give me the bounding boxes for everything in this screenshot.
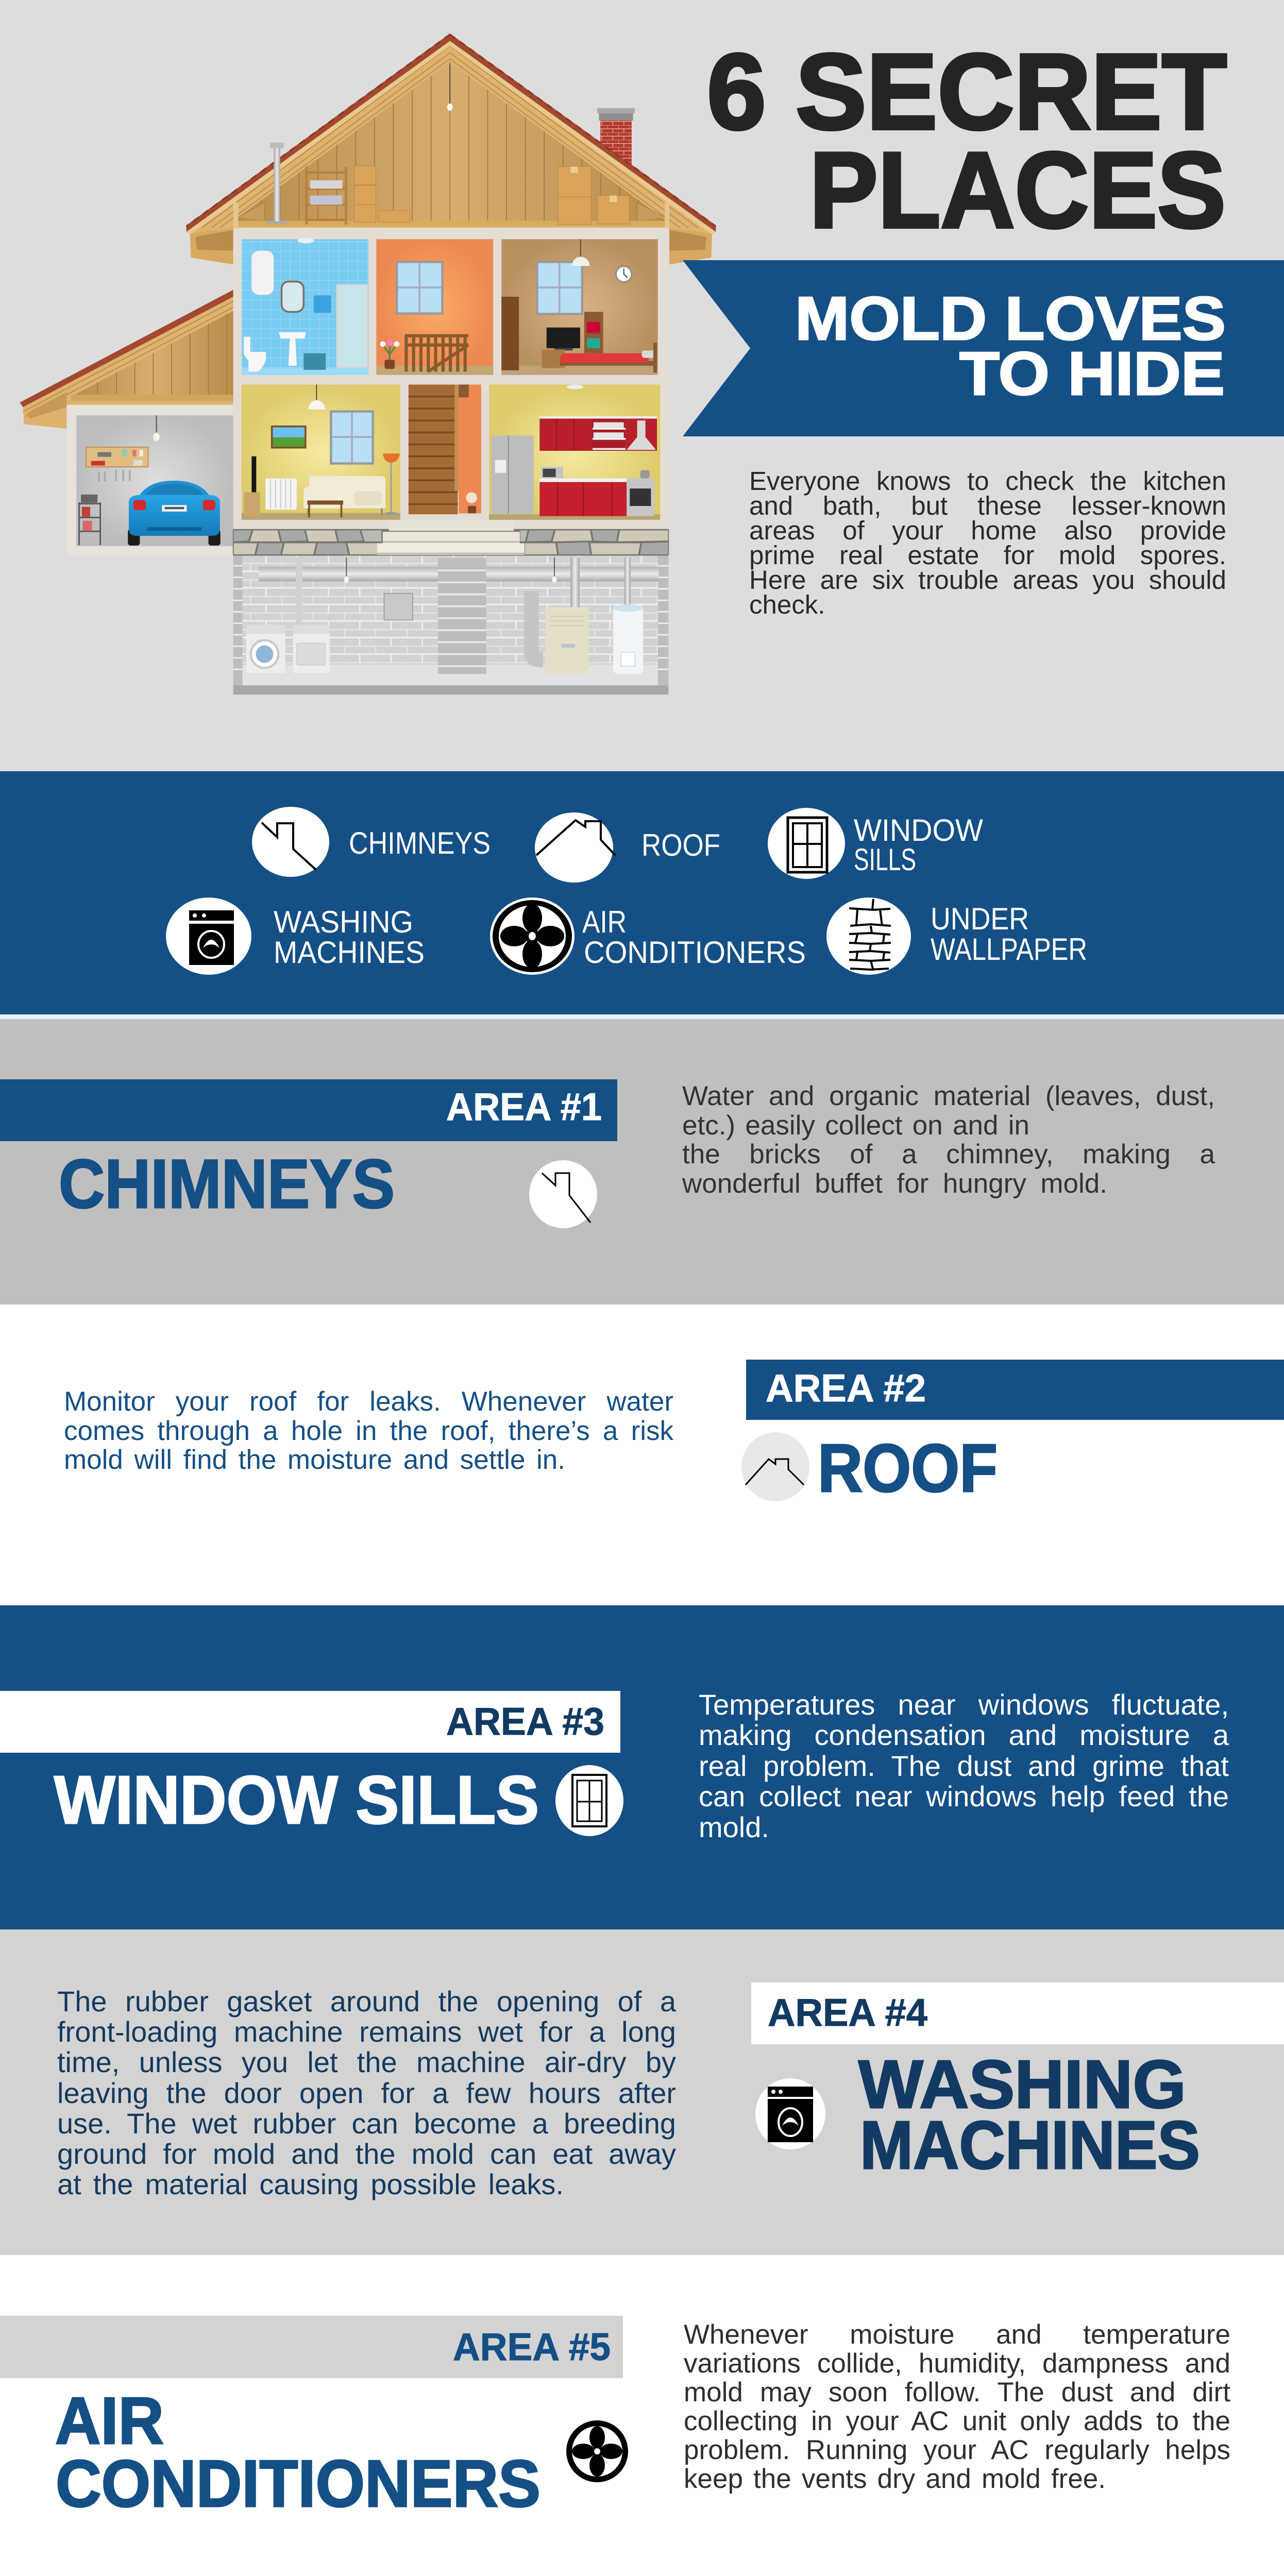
icon: washing machine <box>755 2078 825 2149</box>
area 4 text: leaving the door open for a few hours after <box>57 2077 676 2109</box>
area 4 text: ground for mold and the mold can eat away <box>57 2138 676 2170</box>
panel: six areas overview <box>0 771 1284 1019</box>
area 3 text: Temperatures near windows fluctuate, <box>699 1688 1229 1721</box>
title: 6 SECRET <box>707 32 1227 152</box>
room: bedroom <box>501 239 658 375</box>
area 1 text: etc.) easily collect on and in <box>682 1110 1029 1141</box>
area 1 text: the bricks of a chimney, making a <box>682 1139 1215 1170</box>
panel: area 2 roof <box>0 1304 1284 1605</box>
area 3 label bar: AREA #3 <box>446 1700 604 1743</box>
area 3 label bar <box>0 1691 620 1753</box>
icon: window <box>555 1765 623 1836</box>
intro text: Here are six trouble areas you should <box>749 565 1226 595</box>
area 2 heading: ROOF <box>818 1430 998 1506</box>
icon: chimney <box>529 1160 597 1228</box>
panel: area 5 air conditioners <box>0 2255 1284 2576</box>
overview item: window sills: WINDOW <box>854 813 983 848</box>
house walls <box>233 229 668 530</box>
subtitle: MOLD LOVES <box>795 284 1226 353</box>
area 2 label bar <box>746 1360 1284 1420</box>
overview item: window sills: SILLS <box>854 842 916 877</box>
basement <box>233 556 668 694</box>
intro text: areas of your home also provide <box>749 516 1226 545</box>
area 3 text: mold. <box>699 1811 769 1843</box>
area 3 heading: WINDOW SILLS <box>54 1762 539 1838</box>
area 2 label bar: AREA #2 <box>766 1366 926 1410</box>
subtitle: TO HIDE <box>959 340 1225 408</box>
area 5 text: Whenever moisture and temperature <box>684 2319 1230 2350</box>
chimney <box>597 108 635 170</box>
car <box>128 481 221 546</box>
intro text: Everyone knows to check the kitchen <box>749 466 1226 496</box>
area 5 heading <box>55 2384 540 2521</box>
eaves <box>190 228 712 264</box>
icon: fan <box>566 2420 628 2482</box>
room: kitchen <box>489 384 660 520</box>
intro text: check. <box>749 590 825 619</box>
area 5 text: keep the vents dry and mold free. <box>684 2464 1106 2494</box>
area 5 label bar <box>0 2316 623 2378</box>
intro text <box>749 466 1226 619</box>
area 4 text <box>57 1985 676 2200</box>
area 2 text: comes through a hole in the roof, there’s a risk <box>64 1416 673 1446</box>
room: staircase <box>409 384 481 514</box>
overview item: chimneys <box>252 807 491 877</box>
area 5 text: variations collide, humidity, dampness and <box>684 2348 1230 2379</box>
area 2 text: Monitor your roof for leaks. Whenever water <box>64 1386 673 1417</box>
area 1 text: wonderful buffet for hungry mold. <box>682 1168 1107 1199</box>
area 5 heading: AIR <box>55 2384 164 2458</box>
area 5 text: collecting in your AC unit only adds to the <box>684 2406 1230 2436</box>
panel: area 1 chimneys <box>0 1019 1284 1304</box>
overview item: washing machines: WASHING <box>274 905 413 939</box>
overview item: under wallpaper <box>826 897 1087 975</box>
intro text: and bath, but these lesser-known <box>749 491 1226 520</box>
area 1 text <box>682 1081 1215 1199</box>
overview item: air conditioners: AIR <box>582 905 627 939</box>
overview item: air conditioners <box>490 897 806 975</box>
overview item: window sills <box>768 808 983 879</box>
panel: area 4 washing machines <box>0 1929 1284 2255</box>
overview item: washing machines: MACHINES <box>274 935 425 970</box>
area 4 text: at the material causing possible leaks. <box>57 2168 564 2200</box>
area 5 text: mold may soon follow. The dust and dirt <box>684 2377 1230 2408</box>
area 3 text: making condensation and moisture a <box>699 1719 1229 1751</box>
area 3 text <box>699 1688 1229 1843</box>
area 4 text: use. The wet rubber can become a breeding <box>57 2107 676 2140</box>
area 1 heading: CHIMNEYS <box>59 1146 395 1223</box>
overview item: under wallpaper: WALLPAPER <box>931 932 1087 967</box>
area 4 heading <box>858 2046 1200 2183</box>
garage <box>20 290 233 556</box>
main roof and attic <box>187 33 716 234</box>
area 5 text <box>684 2319 1230 2494</box>
area 5 label bar: AREA #5 <box>453 2325 611 2368</box>
area 1 label bar <box>0 1079 617 1141</box>
area 4 label bar <box>751 1982 1284 2044</box>
title: PLACES <box>809 130 1226 250</box>
overview item: chimneys: CHIMNEYS <box>349 826 491 860</box>
area 4 text: front-loading machine remains wet for a long <box>57 2015 676 2048</box>
title <box>707 32 1227 250</box>
area 4 heading: WASHING <box>858 2046 1186 2122</box>
area 2 text <box>64 1386 673 1475</box>
overview item: roof: ROOF <box>641 828 720 862</box>
entry steps <box>377 521 525 555</box>
icon: roof <box>741 1432 809 1501</box>
banner <box>683 260 1284 436</box>
panel: hero <box>0 0 1284 771</box>
illustration: cutaway house <box>20 33 716 694</box>
area 1 text: Water and organic material (leaves, dust, <box>682 1081 1215 1111</box>
area 5 text: problem. Running your AC regularly helps <box>684 2435 1230 2465</box>
area 4 heading: MACHINES <box>860 2107 1200 2183</box>
area 5 heading: CONDITIONERS <box>56 2447 540 2521</box>
overview item: under wallpaper: UNDER <box>931 902 1029 936</box>
overview item: roof <box>535 812 720 883</box>
area 3 text: can collect near windows help feed the <box>699 1780 1229 1812</box>
area 1 label bar: AREA #1 <box>446 1085 602 1128</box>
overview item: washing machines <box>166 897 425 975</box>
subtitle <box>795 284 1226 408</box>
area 3 text: real problem. The dust and grime that <box>699 1750 1229 1782</box>
intro text: prime real estate for mold spores. <box>749 540 1226 570</box>
area 4 label bar: AREA #4 <box>768 1991 927 2034</box>
room: bathroom <box>242 238 368 375</box>
area 4 text: The rubber gasket around the opening of a <box>57 1985 676 2018</box>
room: living room <box>242 384 400 520</box>
area 2 text: mold will find the moisture and settle in. <box>64 1445 565 1475</box>
room: upstairs landing <box>376 239 493 375</box>
area 4 text: time, unless you let the machine air-dry by <box>57 2046 676 2078</box>
overview item: air conditioners: CONDITIONERS <box>584 935 806 970</box>
panel: area 3 window sills <box>0 1605 1284 1929</box>
stone foundation <box>233 529 668 556</box>
